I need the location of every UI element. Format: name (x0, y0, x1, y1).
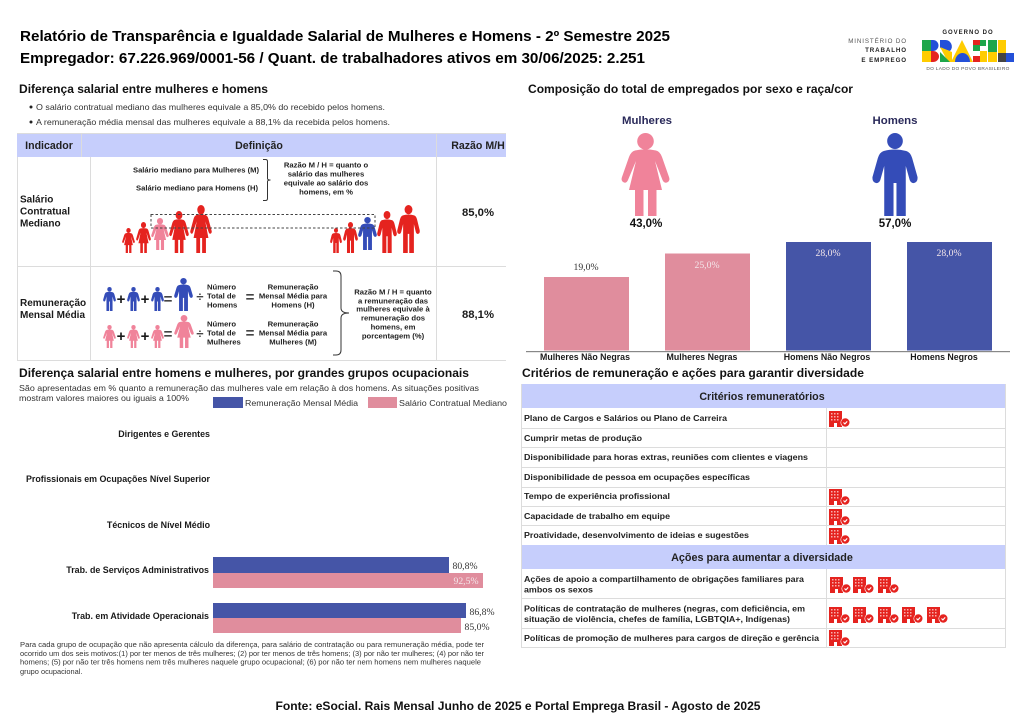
bullets: O salário contratual mediano das mulheres equivale a 85,0% do recebido pelos homens. (36, 102, 385, 112)
formula: mulheres: ÷ (196, 326, 204, 341)
bar chart: sexo e raça/cor: Mulheres Negras (667, 352, 738, 362)
table: indicadores (17, 133, 506, 361)
description text: São apresentadas em % quanto a remuneração das mulheres vale em relação à dos homens. As situações positivas (19, 383, 479, 393)
row: remuneração mensal média: Remuneração (20, 298, 86, 309)
row: salário contratual mediano: Salário mediano para Homens (H) (136, 184, 258, 192)
formula: mulheres (103, 315, 328, 348)
figure: mulheres 43,0% (622, 115, 672, 230)
formula: homens: Homens (H) (271, 300, 315, 310)
bar chart: grupos ocupacionais: 85,0% (464, 622, 490, 633)
formula: mulheres: Mulheres (M) (269, 338, 317, 346)
heading: composição: Composição do total de empregados por sexo e raça/cor (528, 84, 854, 96)
bar chart: grupos ocupacionais: Dirigentes e Gerentes (118, 429, 210, 439)
criteria rows: Disponibilidade de pessoa em ocupações específicas (524, 472, 750, 482)
formula: homens: Total de (207, 292, 237, 300)
heading: critérios e ações: Critérios de remuneração e ações para garantir diversidade (522, 368, 864, 380)
formula: homens: Número (207, 282, 236, 292)
footnote (20, 640, 485, 676)
heading: diferença salarial: Diferença salarial entre mulheres e homens (19, 84, 268, 96)
row: remuneração mensal média: mulheres equivale à (356, 304, 430, 314)
criteria rows: Plano de Cargos e Salários ou Plano de Carreira (524, 413, 727, 423)
row: remuneração mensal média: homens, em (371, 322, 416, 332)
formula: homens (103, 278, 328, 311)
logo: governo do brasil: DO LADO DO POVO BRASILEIRO (926, 66, 1010, 72)
row: remuneração mensal média: remuneração dos (361, 314, 425, 322)
row: remuneração mensal média: Mensal Média (20, 310, 85, 321)
row: remuneração mensal média: 88,1% (462, 309, 494, 321)
figure: mulheres 43,0%: 43,0% (630, 218, 662, 230)
table header: Razão M/H (451, 140, 505, 152)
bar chart: sexo e raça/cor: 28,0% (815, 248, 841, 259)
logo: ministério do trabalho e emprego: TRABALHO (865, 47, 907, 54)
bar chart: grupos ocupacionais: 80,8% (452, 561, 478, 572)
icons: criteria companies (829, 411, 850, 544)
logo: ministério do trabalho e emprego (848, 38, 907, 64)
figure: homens 57,0%: 57,0% (879, 218, 911, 230)
bar chart: sexo e raça/cor (526, 242, 1010, 362)
table header: Definição (235, 140, 283, 152)
header title: Relatório de Transparência e Igualdade Salarial de Mulheres e Homens - 2º Semestre 2025 (20, 29, 670, 45)
bar chart: grupos ocupacionais: Trab. de Serviços Administrativos (66, 565, 209, 575)
formula: mulheres: = (246, 325, 255, 342)
icons: men lineup (330, 205, 420, 253)
bar chart: sexo e raça/cor: 25,0% (694, 260, 720, 271)
formula: mulheres: Número (207, 320, 236, 328)
formula: homens: + (141, 291, 150, 308)
logo: governo do brasil: GOVERNO DO (942, 30, 994, 36)
formula: mulheres: + (141, 328, 150, 345)
legend (213, 397, 507, 408)
header: ações para aumentar a diversidade: Ações para aumentar a diversidade (671, 552, 853, 564)
footnote: grupo ocupacional. (20, 667, 82, 676)
action rows: Políticas de contratação de mulheres (negras, com deficiência, em (524, 604, 805, 614)
footnote: Para cada grupo de ocupação que não apresenta cálculo da diferença, para salário de contratação ou para remuneração média, pode ter (20, 640, 485, 649)
figure: homens 57,0%: Homens (873, 115, 917, 127)
criteria rows: Tempo de experiência profissional (524, 491, 670, 501)
bar chart: grupos ocupacionais: Trab. em Atividade Operacionais (72, 611, 209, 621)
row: salário contratual mediano: homens, em % (299, 188, 353, 196)
formula: mulheres: + (117, 328, 126, 345)
legend: Salário Contratual Mediano (399, 398, 507, 408)
action rows: ambos os sexos (524, 584, 593, 594)
logo: governo do brasil (922, 30, 1014, 72)
bar chart: grupos ocupacionais: 92,5% (453, 576, 479, 587)
row: salário contratual mediano: Contratual (20, 206, 70, 218)
bar chart: sexo e raça/cor: Mulheres Não Negras (540, 352, 630, 362)
row: salário contratual mediano (20, 160, 494, 253)
row: salário contratual mediano: Salário (20, 194, 53, 206)
bar chart: grupos ocupacionais (26, 429, 495, 633)
bar chart: sexo e raça/cor: 28,0% (936, 248, 962, 259)
formula: homens: Homens (207, 300, 237, 310)
header title (20, 29, 670, 67)
row: remuneração mensal média: Razão M / H = quanto (354, 288, 432, 296)
logo: ministério do trabalho e emprego: E EMPREGO (861, 57, 907, 64)
criteria rows: Cumprir metas de produção (524, 433, 642, 443)
row: remuneração mensal média (20, 271, 494, 355)
source footer: Fonte: eSocial. Rais Mensal Junho de 2025 e Portal Emprega Brasil - Agosto de 2025 (276, 699, 761, 713)
bar chart: sexo e raça/cor: Homens Negros (910, 352, 978, 362)
formula: mulheres: Remuneração (268, 320, 319, 328)
bullets (30, 102, 390, 127)
formula: mulheres: = (164, 326, 173, 343)
action rows: Ações de apoio a compartilhamento de obrigações familiares para (524, 574, 804, 584)
formula: mulheres: Total de (207, 328, 237, 338)
formula: homens: ÷ (196, 289, 204, 304)
row: remuneração mensal média: a remuneração das (358, 296, 428, 306)
formula: mulheres: Mulheres (207, 338, 241, 346)
footnote: homens; (5) por não ter três homens nem três mulheres naquele grupo ocupacional; (6) por não ter nem homens nem mulheres naquele (20, 658, 481, 666)
icons: action companies (829, 577, 948, 646)
logo: ministério do trabalho e emprego: MINISTÉRIO DO (848, 38, 907, 45)
formula: mulheres: Mensal Média para (259, 328, 328, 338)
formula: homens: = (246, 289, 255, 306)
heading: diferença por grupos: Diferença salarial entre homens e mulheres, por grandes grupos ocupacionais (19, 368, 469, 380)
figure: homens 57,0% (872, 115, 918, 230)
bar chart: grupos ocupacionais: Técnicos de Nível Médio (107, 520, 211, 530)
action rows (524, 574, 819, 643)
formula: homens: Remuneração (268, 282, 319, 292)
bullets: A remuneração média mensal das mulheres equivale a 88,1% da recebida pelos homens. (36, 117, 390, 127)
table header (25, 140, 505, 152)
bar chart: grupos ocupacionais: Profissionais em Ocupações Nível Superior (26, 474, 211, 484)
action rows: Políticas de promoção de mulheres para cargos de direção e gerência (524, 633, 819, 643)
criteria rows (524, 413, 808, 540)
header: critérios remuneratórios: Critérios remuneratórios (699, 391, 825, 403)
formula: homens: = (164, 291, 173, 308)
row: salário contratual mediano: Mediano (20, 218, 61, 230)
formula: homens: Mensal Média para (259, 292, 328, 300)
row: salário contratual mediano: Salário mediano para Mulheres (M) (133, 166, 259, 174)
row: salário contratual mediano: 85,0% (462, 207, 494, 219)
table header: Indicador (25, 140, 73, 152)
icons: women lineup (122, 205, 212, 253)
action rows: situação de violência, chefes de família, LGBTQIA+, Indígenas) (524, 614, 790, 624)
bar chart: grupos ocupacionais: 86,8% (469, 607, 495, 618)
description text (19, 383, 479, 403)
criteria rows: Capacidade de trabalho em equipe (524, 511, 670, 521)
formula: homens: + (117, 291, 126, 308)
bar chart: sexo e raça/cor: 19,0% (573, 262, 599, 273)
row: salário contratual mediano: equivale ao salário dos (284, 178, 368, 188)
figure: mulheres 43,0%: Mulheres (622, 115, 672, 127)
footnote: ocorrido um dos seis motivos:(1) por ter menos de três mulheres; (2) por ter menos de três homens; (3) por não ter mulheres; (4) por não ter (20, 649, 485, 658)
row: salário contratual mediano: Razão M / H = quanto o (284, 160, 368, 170)
legend: Remuneração Mensal Média (245, 398, 358, 408)
header title: Empregador: 67.226.969/0001-56 / Quant. de trabalhadores ativos em 30/06/2025: 2.251 (20, 51, 645, 67)
criteria rows: Proatividade, desenvolvimento de ideias e sugestões (524, 530, 749, 540)
table: critérios e ações (521, 384, 1006, 648)
row: remuneração mensal média: porcentagem (%) (362, 332, 425, 340)
description text: mostram valores maiores ou iguais a 100% (19, 393, 190, 403)
criteria rows: Disponibilidade para horas extras, reuniões com clientes e viagens (524, 452, 808, 462)
row: salário contratual mediano: salário das mulheres (288, 170, 364, 178)
bar chart: sexo e raça/cor: Homens Não Negros (784, 352, 870, 362)
